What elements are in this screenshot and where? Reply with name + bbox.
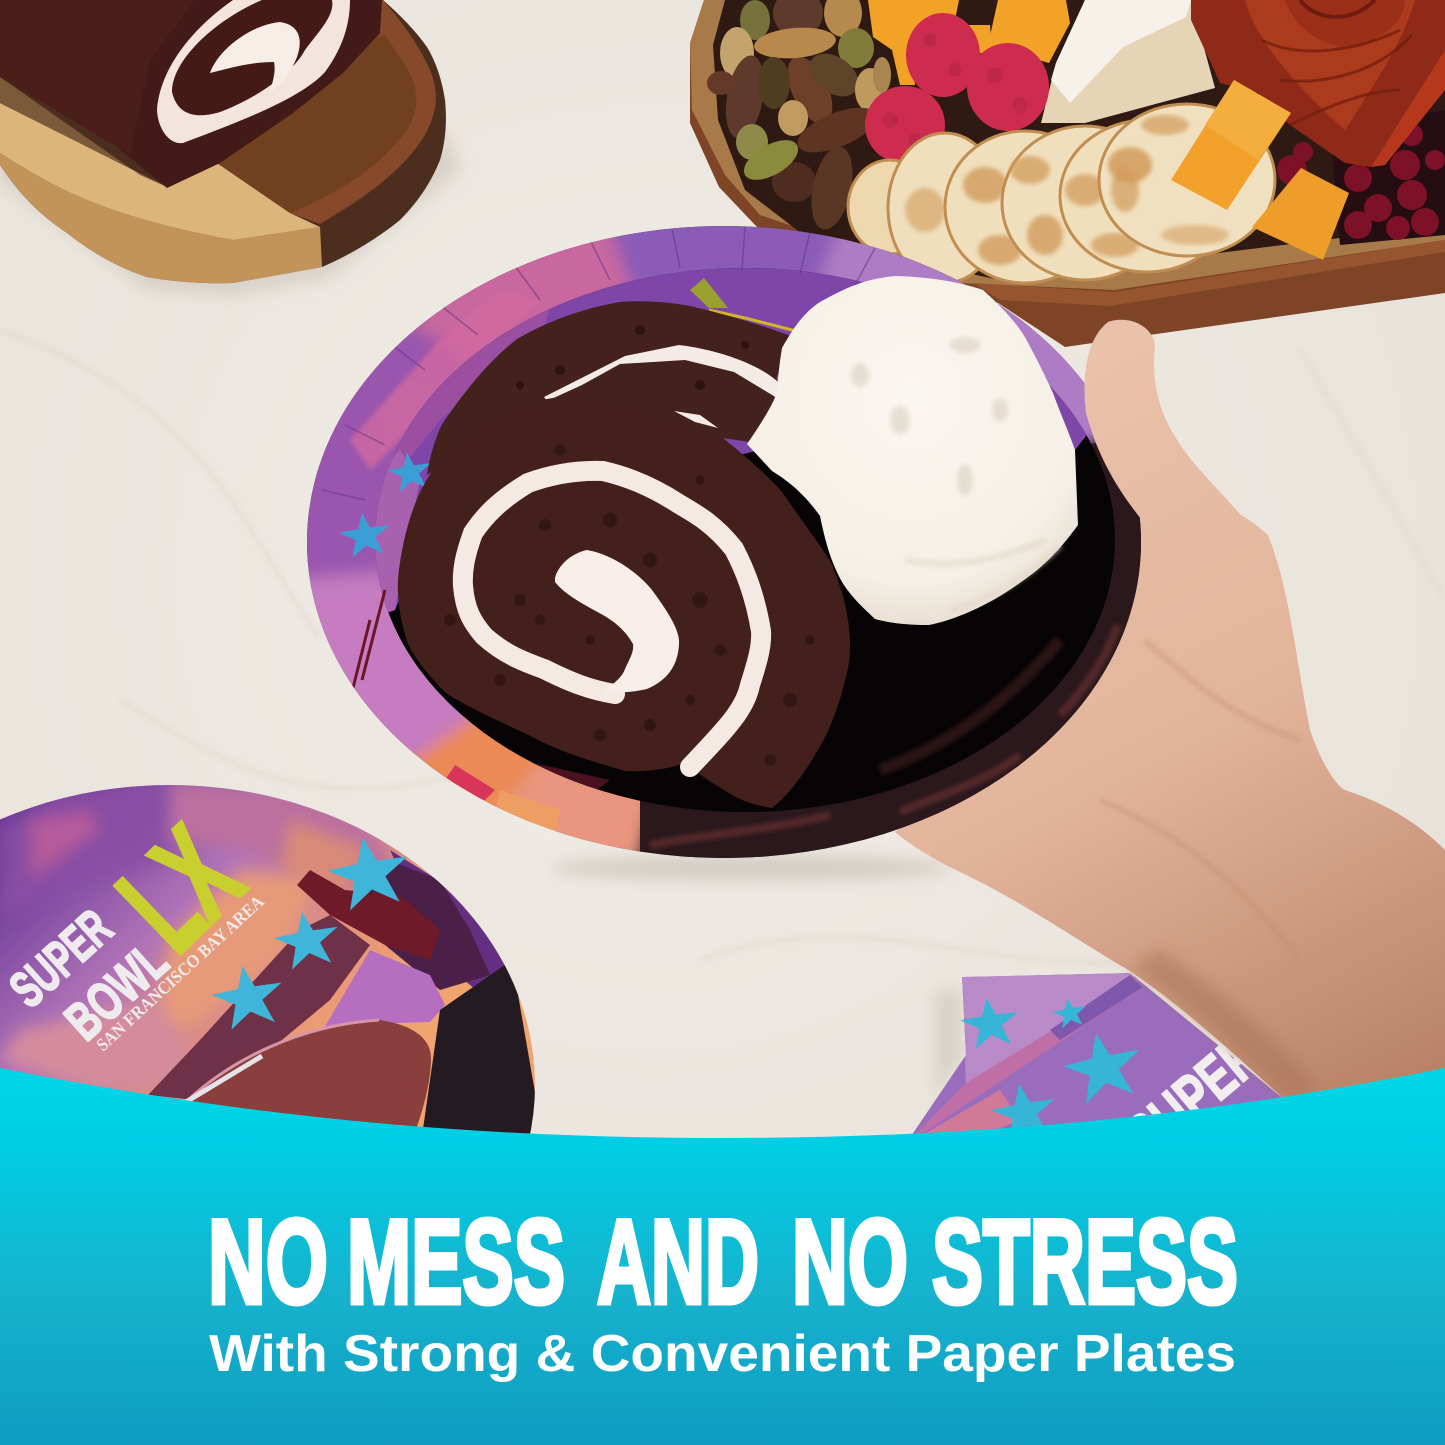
nuts (707, 0, 891, 233)
plate logo: SUPER (0, 899, 123, 1019)
headline: NO (208, 1195, 328, 1329)
back cake slice (427, 301, 799, 475)
cake on wooden board (0, 0, 446, 283)
rim pleat lines (322, 226, 875, 500)
front cake slice with swirl (398, 397, 850, 808)
bridge lines on plate (352, 590, 386, 688)
pomegranate seeds (1277, 110, 1445, 245)
teal wave banner (0, 1068, 1445, 1445)
hand: thumb over the plate rim (1085, 320, 1250, 530)
headline (208, 1195, 1238, 1329)
plate well (375, 268, 1115, 812)
charcuterie board (690, 0, 1445, 347)
headline: MESS (347, 1195, 565, 1329)
ice cream scoop (747, 276, 1078, 625)
plate logo: LX (91, 800, 268, 978)
raspberries (865, 13, 1049, 164)
hand: palm and wrist (895, 480, 1445, 1100)
cheddar cubes in front (1171, 80, 1349, 260)
soft shadows beneath objects (0, 130, 962, 1100)
brie (1041, 0, 1215, 123)
wooden tray (690, 0, 1445, 347)
plate logo: BOWL (54, 930, 179, 1052)
stars (207, 830, 415, 1032)
salami rose (1191, 0, 1445, 167)
subheading: With Strong & Convenient Paper Plates (209, 1325, 1236, 1383)
headline: NO (792, 1195, 908, 1329)
orange cheese behind berries (868, 0, 1070, 85)
rim colours (0, 780, 170, 920)
headline: AND (597, 1195, 759, 1329)
rim colours (307, 226, 1096, 852)
napkin: SUPER (1115, 1021, 1274, 1171)
dark marbled rim (640, 442, 1141, 858)
plate logo: SAN FRANCISCO BAY AREA (92, 891, 268, 1055)
bottom-left plate (0, 785, 535, 1134)
football (192, 1020, 431, 1126)
wooden board (0, 0, 446, 283)
plate stars (337, 449, 435, 559)
pink streaks and red patch (349, 334, 476, 470)
headline: STRESS (932, 1195, 1238, 1329)
crackers (848, 104, 1275, 283)
napkin (912, 973, 1282, 1134)
plate logo (0, 800, 268, 1055)
chocolate roll cake (0, 0, 382, 188)
plate logo fragment (690, 278, 728, 308)
main paper plate (307, 226, 1141, 858)
